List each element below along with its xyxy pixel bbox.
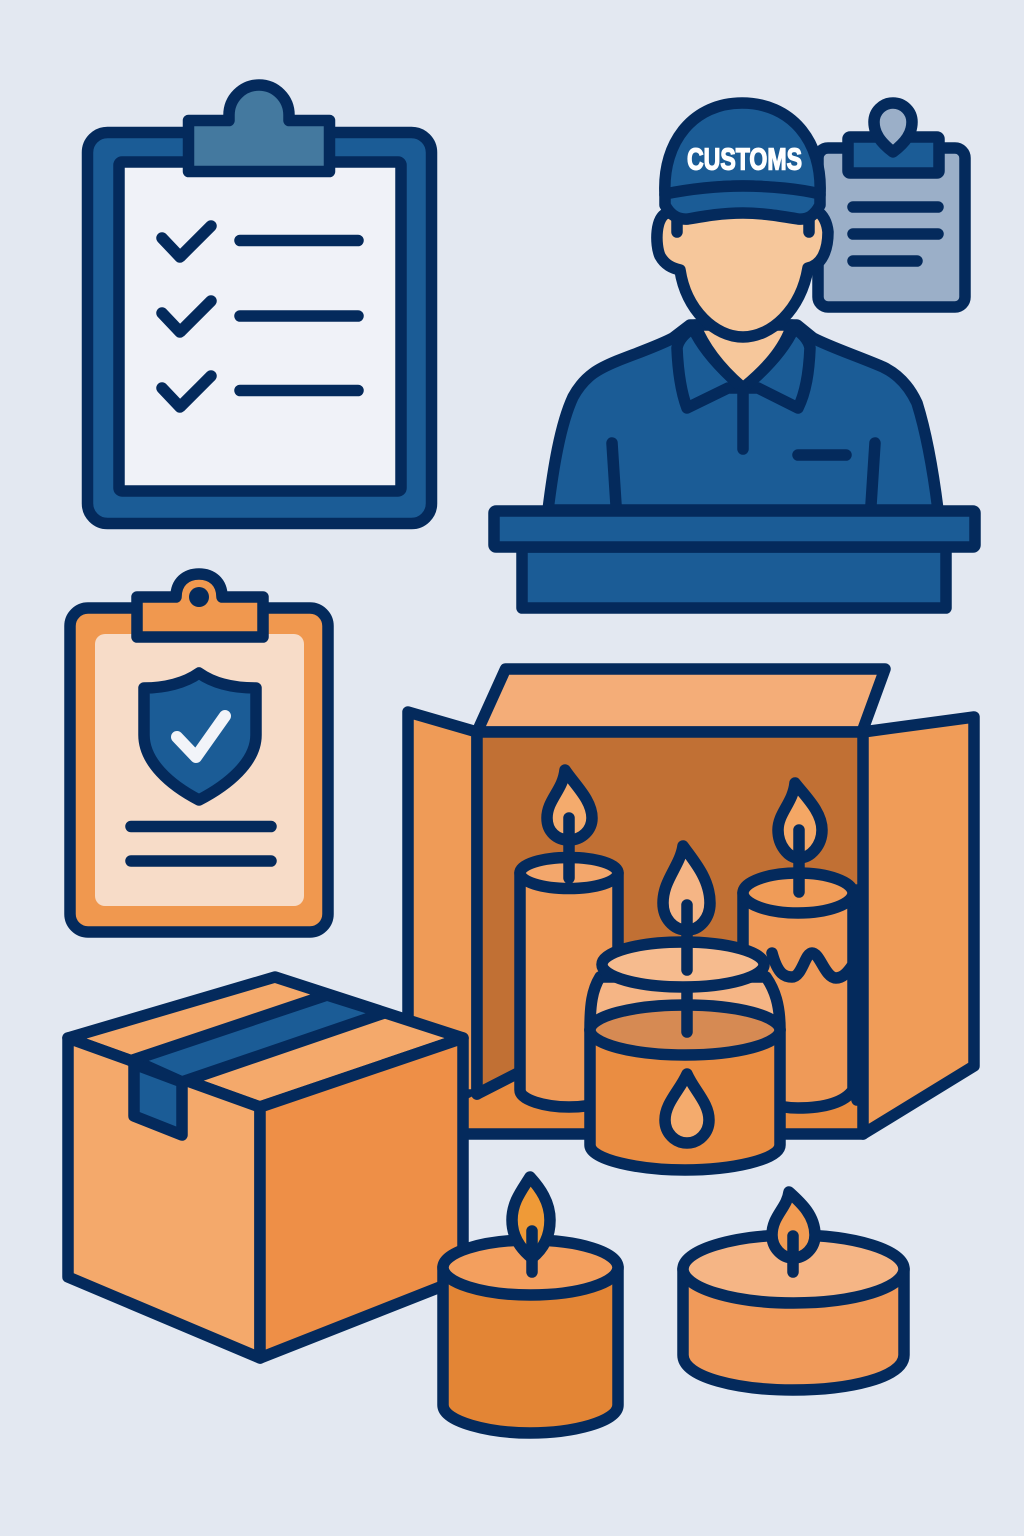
icon: safety document clipboard bbox=[70, 574, 328, 932]
officer cap bbox=[665, 103, 820, 219]
icon: tall pillar candle bbox=[520, 770, 618, 1107]
icon: checklist clipboard bbox=[88, 85, 432, 524]
box left face bbox=[68, 1038, 260, 1358]
jar droplet emblem bbox=[665, 1074, 709, 1143]
officer neck bbox=[695, 325, 792, 388]
checklist row 3 bbox=[162, 376, 358, 407]
shirt details bbox=[612, 390, 875, 505]
icon: dripping candle bbox=[743, 783, 857, 1108]
cap label: CUSTOMS bbox=[687, 142, 802, 176]
icon: small clipboard behind officer bbox=[818, 103, 965, 307]
box right flap bbox=[863, 717, 974, 1134]
icon: medium candle bbox=[443, 1177, 618, 1433]
checklist row 1 bbox=[162, 226, 358, 257]
icon: jar candle bbox=[590, 846, 780, 1170]
icon: customs officer bbox=[548, 103, 938, 510]
shield with check bbox=[144, 673, 256, 800]
box top flap bbox=[477, 669, 885, 732]
checklist row 2 bbox=[162, 301, 358, 332]
packing tape bbox=[133, 995, 384, 1135]
officer collar bbox=[677, 328, 810, 408]
document lines bbox=[131, 826, 271, 861]
box left flap bbox=[408, 712, 477, 1095]
icon: wide tea light candle bbox=[683, 1192, 904, 1390]
box right face bbox=[260, 1038, 463, 1358]
officer face bbox=[657, 190, 828, 337]
customs desk bbox=[494, 511, 975, 608]
box top bbox=[68, 977, 463, 1107]
box interior bbox=[477, 732, 863, 1134]
officer shirt bbox=[548, 325, 938, 510]
icon: open cardboard box bbox=[408, 669, 974, 1134]
icon: sealed cardboard box bbox=[68, 977, 463, 1358]
